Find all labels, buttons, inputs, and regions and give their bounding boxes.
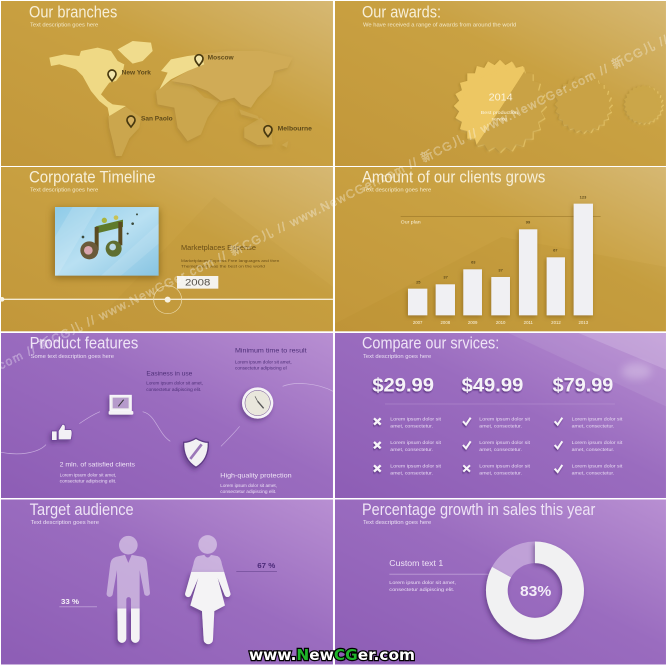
label: Melbourne: Melbourne	[278, 126, 312, 133]
medal: 2014	[454, 60, 546, 152]
bar chart: 67	[553, 247, 558, 252]
custom text block	[389, 558, 489, 592]
pin: Melbourne	[264, 126, 272, 137]
bar chart: 99	[526, 220, 531, 225]
callout: 33%: 33 %	[61, 599, 80, 606]
icon: laptop	[109, 396, 133, 415]
panel: Corporate Timeline	[0, 167, 333, 331]
prices: $79.99	[553, 376, 614, 397]
panel: Percentage growth	[335, 500, 666, 664]
title: Corporate Timeline	[29, 167, 156, 186]
panel: Target audience	[1, 500, 333, 664]
feature: easiness in use	[146, 371, 203, 392]
panel: Our branches	[1, 1, 333, 166]
panel: Compare our services	[335, 333, 666, 498]
column 3 marks	[555, 418, 562, 472]
bar chart: 63	[471, 260, 476, 265]
bar chart: 123	[580, 195, 587, 200]
title: Amount of our clients grows	[362, 167, 545, 186]
column 2 marks	[463, 418, 471, 472]
bar chart: 2007	[413, 320, 423, 325]
feature: satisfied clients: consectetur adipiscing elit.	[60, 479, 116, 484]
callout: 67%	[236, 563, 277, 572]
feature: satisfied clients: Lorem ipsum dolor sit amet,	[60, 473, 116, 478]
pin: San Paolo	[127, 116, 135, 127]
title: Percentage growth in sales this year	[362, 500, 596, 519]
callout: 33%	[59, 599, 97, 607]
column 1 text: amet, consectetur.	[390, 424, 433, 429]
title: Target audience	[30, 500, 134, 519]
feature: easiness in use: consectetur adipiscing elit.	[146, 387, 201, 392]
subtitle: Text description goes here	[31, 520, 99, 526]
icon: thumbs up	[52, 424, 72, 440]
column 2 text: amet, consectetur.	[479, 424, 522, 429]
column 2 text: Lorem ipsum dolor sit	[479, 463, 531, 468]
subtitle: Some text description goes here	[31, 354, 114, 360]
year label: 2008	[177, 276, 218, 289]
feature: protection: Lorem ipsum dolor sit amet,	[220, 483, 277, 488]
column 1 marks	[374, 418, 381, 472]
event heading: Marketplaces Expense	[181, 245, 256, 252]
bar chart: 37	[443, 275, 449, 280]
medal: 2014: service	[492, 116, 507, 122]
bar chart: 25	[416, 279, 421, 284]
icon: clock	[242, 387, 273, 419]
column 3 text: Lorem ipsum dolor sit	[572, 440, 623, 445]
panel: Our awards	[335, 1, 666, 166]
column 1 text: amet, consectetur.	[390, 447, 433, 452]
feature: satisfied clients	[60, 461, 136, 484]
title: Our awards:	[362, 2, 441, 21]
event description	[181, 258, 279, 268]
bar chart: 2009	[468, 320, 478, 325]
bar chart: 2012	[551, 320, 561, 325]
column 3 text: amet, consectetur.	[572, 470, 614, 475]
figure: woman	[185, 535, 231, 644]
subtitle: Text description goes here	[30, 187, 98, 193]
donut chart: 83%	[520, 584, 551, 600]
column 1 text: Lorem ipsum dolor sit	[390, 417, 442, 422]
prices: $29.99	[372, 376, 434, 397]
column 3 text: amet, consectetur.	[572, 424, 614, 429]
feature: protection	[220, 472, 292, 494]
feature: protection: consectetur adipiscing elit.	[220, 489, 276, 494]
panel: Amount of our clients grows	[335, 167, 666, 331]
bar chart: 2008	[441, 320, 451, 325]
prices	[372, 376, 614, 397]
feature: minimum time: consectetur adipiscing el	[235, 366, 287, 371]
column 1 text	[390, 417, 442, 475]
column 1 text: amet, consectetur.	[390, 470, 433, 475]
medal: 2014: 2014	[489, 92, 513, 103]
timeline	[0, 286, 333, 314]
column 2 text: amet, consectetur.	[479, 447, 522, 452]
figure: man	[107, 536, 150, 643]
year label: 2008: 2008	[185, 277, 210, 287]
callout: 67%: 67 %	[257, 563, 276, 570]
column 1 text: Lorem ipsum dolor sit	[390, 440, 442, 445]
label: New York: New York	[122, 70, 151, 77]
column 2 text: amet, consectetur.	[479, 470, 522, 475]
title: Our branches	[29, 2, 117, 21]
column 2 text	[479, 417, 531, 475]
world map	[49, 41, 293, 156]
title: Compare our srvices:	[362, 333, 499, 352]
subtitle: We have received a range of awards from around the world	[363, 22, 516, 28]
bar chart: 2011	[524, 320, 534, 325]
column 3 text	[572, 417, 623, 475]
event description: Marketplaces Express Free languages and then	[181, 258, 279, 263]
column 3 text: Lorem ipsum dolor sit	[572, 463, 623, 468]
feature: minimum time: Lorem ipsum dolor sit amet,	[235, 360, 292, 365]
feature: easiness in use: Lorem ipsum dolor sit amet,	[146, 381, 203, 386]
custom text block: Custom text 1	[389, 558, 444, 568]
donut chart	[486, 541, 584, 639]
medal: middle gear	[555, 76, 612, 133]
subtitle: Text description goes here	[363, 520, 431, 526]
bar chart: 37	[498, 267, 504, 272]
panel: Product features	[1, 333, 333, 498]
icon: shield	[184, 438, 208, 467]
bar chart: 2013	[578, 320, 589, 325]
site banner: www.NewCGer.com	[249, 646, 415, 664]
column 1 text: Lorem ipsum dolor sit	[390, 463, 442, 468]
prices: $49.99	[462, 376, 524, 397]
photo card	[54, 207, 159, 278]
label: San Paolo: San Paolo	[141, 116, 173, 123]
custom text block: consectetur adipiscing elit.	[389, 587, 454, 592]
subtitle: Text description goes here	[363, 187, 431, 193]
column 2 text: Lorem ipsum dolor sit	[479, 417, 531, 422]
plan line: Our plan	[401, 220, 421, 225]
column 2 text: Lorem ipsum dolor sit	[479, 440, 531, 445]
custom text block: Lorem ipsum dolor sit amet,	[389, 580, 456, 585]
bar chart: 2010	[496, 320, 506, 325]
title: Product features	[30, 333, 138, 352]
column 3 text: Lorem ipsum dolor sit	[572, 417, 623, 422]
subtitle: Text description goes here	[30, 22, 98, 28]
feature: minimum time: Minimum time to result	[235, 348, 307, 355]
feature: protection: High-quality protection	[220, 472, 292, 479]
column 3 text: amet, consectetur.	[572, 447, 614, 452]
medal: 2014: Best production	[481, 110, 518, 116]
label: Moscow: Moscow	[208, 54, 234, 61]
connector curve	[1, 384, 333, 454]
feature: minimum time	[235, 348, 307, 371]
event description: Themeforest was the best on the world	[181, 263, 265, 268]
bar chart	[408, 195, 593, 325]
pin: Moscow	[195, 55, 203, 66]
feature: easiness in use: Easiness in use	[146, 371, 193, 378]
medal: right gear	[624, 85, 663, 124]
subtitle: Text description goes here	[363, 354, 431, 360]
feature: satisfied clients: 2 mln. of satisfied clients	[60, 461, 136, 468]
pin: New York	[108, 70, 116, 81]
